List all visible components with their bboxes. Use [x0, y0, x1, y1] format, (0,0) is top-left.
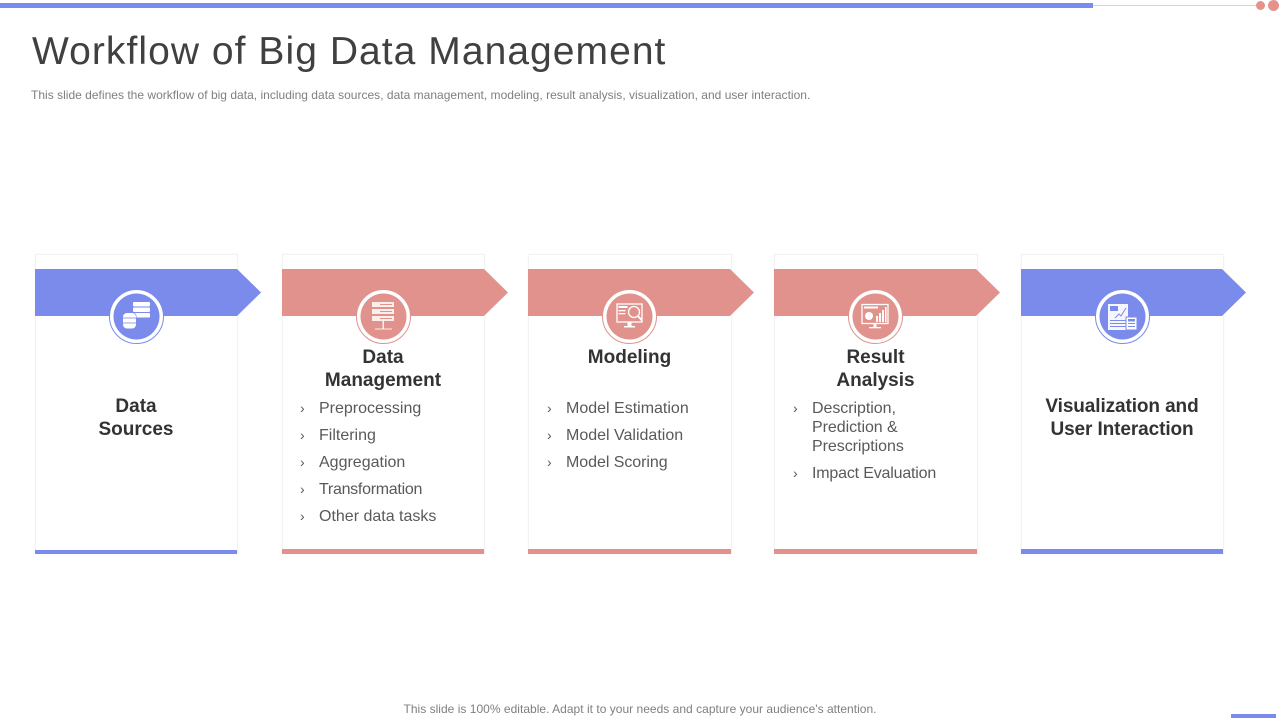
list: data management: › — [300, 481, 305, 497]
heading: data sources: Sources — [98, 419, 173, 440]
list: data management — [300, 400, 436, 525]
icon: monitor with charts — [848, 290, 902, 344]
decorative dots — [1256, 0, 1279, 11]
list: modeling — [547, 400, 689, 471]
heading: modeling: Modeling — [588, 347, 671, 368]
bottom bar: visualization — [1021, 549, 1223, 554]
heading: visualization: User Interaction — [1050, 419, 1194, 440]
list: data management: Other data tasks — [319, 508, 436, 525]
list: result analysis: Prediction & — [812, 419, 898, 436]
list: data management: Transformation — [319, 481, 422, 498]
heading: data management — [325, 347, 441, 391]
footer note: This slide is 100% editable. Adapt it to your needs and capture your audience's attention. — [403, 702, 877, 716]
panel: result analysis — [774, 254, 978, 554]
bottom bar: result analysis — [774, 549, 977, 554]
list: data management: Aggregation — [319, 454, 405, 471]
heading: data sources — [98, 396, 173, 440]
arrow: data management — [282, 269, 508, 316]
icon: report — [1096, 290, 1150, 344]
list: result analysis: › — [793, 465, 798, 481]
heading: visualization: Visualization and — [1045, 396, 1199, 417]
heading: visualization — [1045, 396, 1199, 440]
list: modeling: Model Estimation — [566, 400, 689, 417]
icon: database and server — [110, 290, 164, 344]
list: data management: › — [300, 508, 305, 524]
list: modeling: › — [547, 427, 552, 443]
bottom bar: modeling — [528, 549, 731, 554]
panel: data sources — [35, 254, 238, 554]
slide number bar — [1231, 714, 1276, 718]
bottom bar: data sources — [35, 550, 237, 554]
icon: server rack — [356, 290, 410, 344]
list: result analysis: Impact Evaluation — [812, 465, 936, 482]
subtitle: This slide defines the workflow of big data, including data sources, data management, modeling, result analysis, visualization, and user interaction. — [31, 88, 810, 102]
title: Workflow of Big Data Management — [32, 30, 666, 73]
arrow: modeling — [528, 269, 754, 316]
list: result analysis: › — [793, 400, 798, 416]
panel: visualization — [1021, 254, 1224, 554]
heading: data management: Management — [325, 370, 441, 391]
list: modeling: › — [547, 400, 552, 416]
list: modeling: Model Scoring — [566, 454, 668, 471]
heading: data sources: Data — [115, 396, 157, 417]
heading: result analysis: Analysis — [836, 370, 915, 391]
list: data management: › — [300, 400, 305, 416]
arrow: data sources — [35, 269, 261, 316]
list: result analysis: Description, — [812, 400, 896, 417]
list: data management: Preprocessing — [319, 400, 421, 417]
list: modeling: Model Validation — [566, 427, 683, 444]
list: data management: › — [300, 454, 305, 470]
list: data management: › — [300, 427, 305, 443]
panel: modeling — [528, 254, 732, 554]
panel: data management — [282, 254, 485, 554]
top thin line — [1093, 5, 1258, 6]
list: result analysis — [793, 400, 936, 482]
icon: monitor with magnifier — [602, 290, 656, 344]
arrow: result analysis — [774, 269, 1000, 316]
heading: result analysis: Result — [846, 347, 905, 368]
top progress bar — [0, 3, 1093, 8]
arrow: visualization — [1021, 269, 1246, 316]
heading: data management: Data — [362, 347, 404, 368]
bottom bar: data management — [282, 549, 484, 554]
list: modeling: › — [547, 454, 552, 470]
heading: result analysis — [836, 347, 915, 391]
list: result analysis: Prescriptions — [812, 438, 904, 455]
list: data management: Filtering — [319, 427, 376, 444]
